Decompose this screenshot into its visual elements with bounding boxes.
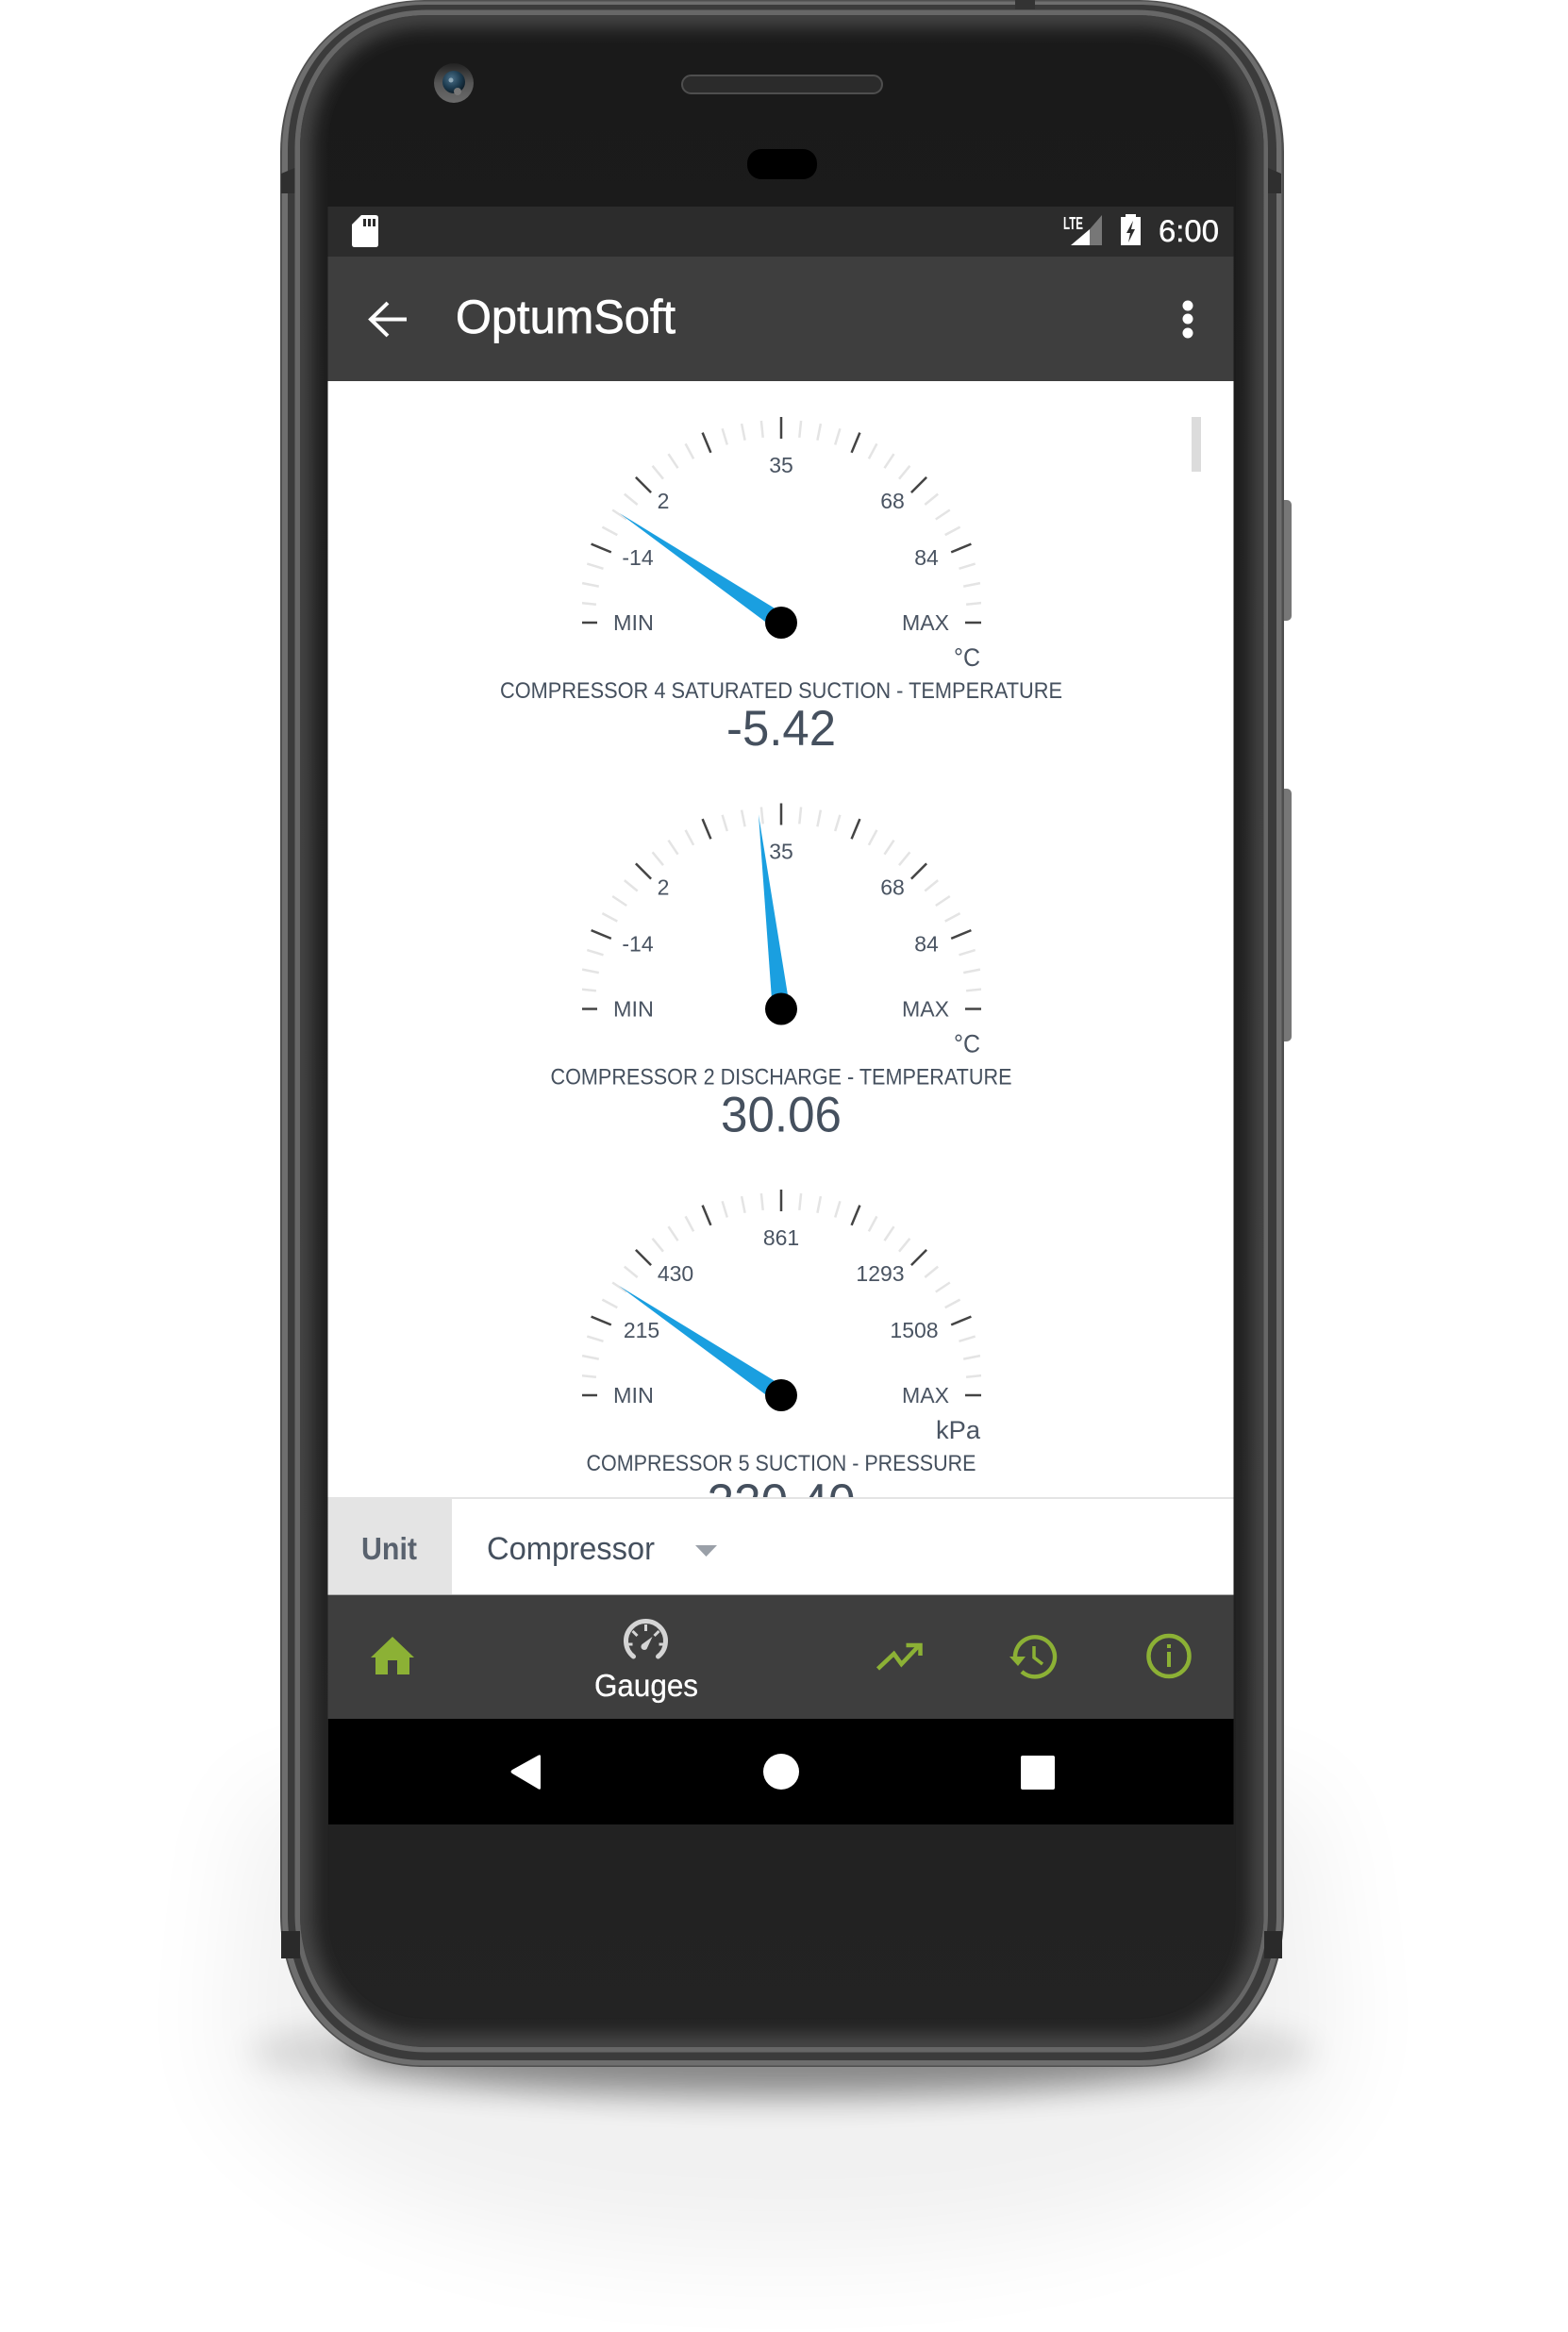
unit selector row — [328, 1497, 1234, 1595]
gauge 2: compressor 2 discharge temperature: -14 — [622, 932, 654, 957]
gauge 1: compressor 4 saturated suction temperature — [500, 417, 1062, 757]
icon: battery charging — [1121, 214, 1141, 245]
nav label: Gauges — [594, 1668, 698, 1703]
gauge 2: compressor 2 discharge temperature: 35 — [769, 840, 793, 864]
icon: sd card — [352, 215, 378, 247]
gauge 3: compressor 5 suction pressure: kPa — [936, 1416, 981, 1444]
selector value: Compressor — [487, 1531, 655, 1567]
gauge 3: compressor 5 suction pressure: 1508 — [890, 1318, 939, 1342]
gauge 3: compressor 5 suction pressure: 215 — [624, 1318, 659, 1342]
icon: info — [1149, 1636, 1189, 1676]
speaker — [682, 75, 882, 93]
gauge 2: compressor 2 discharge temperature: 68 — [880, 875, 905, 900]
icon: home — [371, 1637, 414, 1674]
phone body — [280, 0, 1284, 2067]
gauge 1: compressor 4 saturated suction temperature: 35 — [769, 453, 793, 477]
icon: trend — [877, 1645, 921, 1669]
icon: back arrow — [371, 303, 407, 336]
gauge 1: compressor 4 saturated suction temperature: -5.42 — [726, 701, 836, 757]
gauge 3: compressor 5 suction pressure — [582, 1190, 981, 1497]
gauge 2: compressor 2 discharge temperature: MIN — [613, 996, 654, 1021]
gauge 1: compressor 4 saturated suction temperature: MAX — [902, 610, 949, 635]
gauge 1: compressor 4 saturated suction temperature: COMPRESSOR 4 SATURATED SUCTION - TEMPERATURE — [500, 678, 1062, 704]
status bar — [328, 207, 1234, 257]
gauge 2: compressor 2 discharge temperature: 2 — [658, 875, 669, 900]
gauge 3: compressor 5 suction pressure: MAX — [902, 1383, 949, 1408]
gauge 2: compressor 2 discharge temperature: 30.06 — [721, 1087, 842, 1143]
gauge 3: compressor 5 suction pressure: MIN — [613, 1383, 654, 1408]
side button: power — [1278, 500, 1292, 621]
gauge 3: compressor 5 suction pressure: 430 — [658, 1261, 693, 1286]
gauge 2: compressor 2 discharge temperature: COMPRESSOR 2 DISCHARGE - TEMPERATURE — [551, 1064, 1011, 1091]
gauge 2: compressor 2 discharge temperature: °C — [954, 1030, 980, 1058]
icon: LTE signal: LTE — [1063, 214, 1083, 233]
gauge 2: compressor 2 discharge temperature: MAX — [902, 996, 949, 1021]
selector label: Unit — [361, 1531, 417, 1566]
icon: system back — [511, 1755, 541, 1790]
gauge content panel — [328, 381, 1234, 1530]
icon: system recents — [1021, 1756, 1055, 1790]
app bar — [328, 257, 1234, 381]
gauge 1: compressor 4 saturated suction temperature: -14 — [622, 545, 654, 570]
icon: system home — [763, 1754, 799, 1790]
gauge 1: compressor 4 saturated suction temperature: 84 — [914, 545, 939, 570]
gauge 3: compressor 5 suction pressure: 1293 — [856, 1261, 905, 1286]
clock: 6:00 — [1159, 214, 1219, 248]
side button: volume — [1278, 789, 1292, 1041]
icon: gauges — [626, 1622, 666, 1657]
gauge 1: compressor 4 saturated suction temperature: 2 — [658, 489, 669, 513]
dropdown arrow — [695, 1545, 717, 1557]
android system navigation bar — [328, 1719, 1234, 1824]
gauge 2: compressor 2 discharge temperature — [551, 804, 1011, 1143]
camera — [434, 63, 474, 103]
app title: OptumSoft — [456, 291, 676, 343]
gauge 3: compressor 5 suction pressure: COMPRESSOR 5 SUCTION - PRESSURE — [587, 1451, 976, 1476]
gauge 1: compressor 4 saturated suction temperature: MIN — [613, 610, 654, 635]
gauge 1: compressor 4 saturated suction temperature: 68 — [880, 489, 905, 513]
scrollbar — [1192, 417, 1201, 472]
phone mockup illustration — [235, 0, 1329, 2241]
gauge 3: compressor 5 suction pressure: 861 — [763, 1225, 799, 1250]
gauge 2: compressor 2 discharge temperature: 84 — [914, 932, 939, 957]
background shadow under the phone — [226, 1792, 1340, 2255]
bottom navigation bar — [328, 1595, 1234, 1719]
icon: history — [1009, 1637, 1055, 1676]
icon: LTE signal — [1063, 214, 1102, 245]
icon: overflow menu — [1183, 300, 1193, 338]
gauge 3: compressor 5 suction pressure: 220.40 — [708, 1474, 855, 1530]
gauge 1: compressor 4 saturated suction temperature: °C — [954, 643, 980, 672]
sensor — [747, 149, 817, 179]
